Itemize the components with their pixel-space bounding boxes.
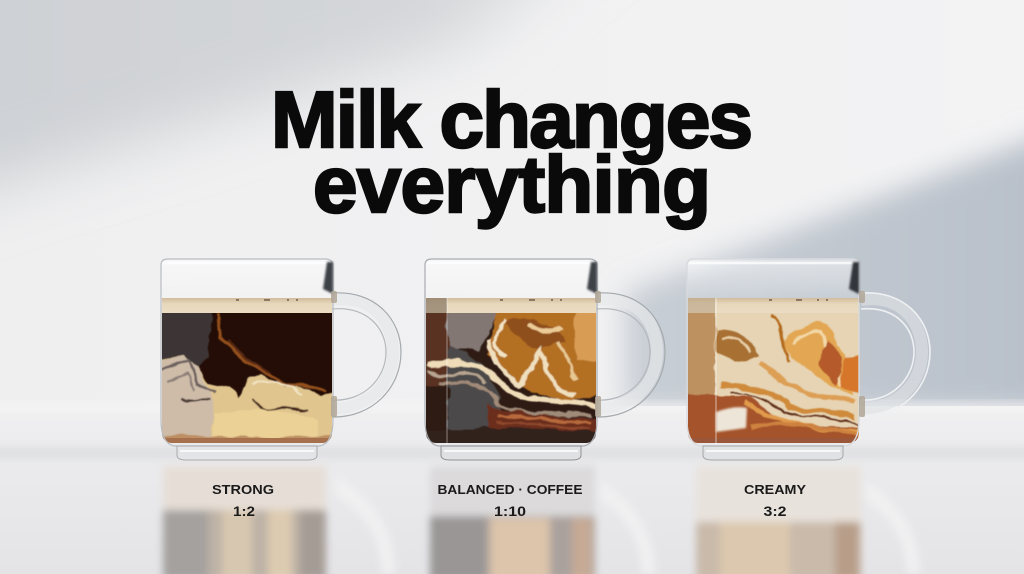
mug handle [597, 293, 665, 417]
coffee and milk swirl [162, 298, 332, 443]
mug: creamy 3:2 [682, 259, 930, 460]
title: everything [313, 140, 711, 229]
label: balanced coffee [438, 482, 583, 519]
title [271, 75, 753, 229]
glass body [425, 259, 597, 460]
mug: balanced 1:10 [420, 259, 665, 460]
reflection: creamy mug [696, 466, 920, 574]
reflection: strong mug [163, 466, 395, 574]
label: creamy: CREAMY [744, 482, 806, 497]
title: Milk changes [271, 75, 753, 164]
mug: strong 1:2 [155, 259, 401, 460]
label: balanced coffee: BALANCED · COFFEE [438, 482, 583, 497]
reflection: balanced mug [430, 466, 655, 574]
label: creamy [744, 482, 806, 519]
glass body [687, 259, 859, 460]
label: strong [212, 482, 274, 519]
glass body [161, 259, 333, 460]
mug handle [861, 293, 930, 417]
coffee and milk swirl [420, 298, 600, 450]
label: strong: 1:2 [233, 503, 255, 519]
handle joints [331, 291, 337, 417]
label: strong: STRONG [212, 482, 274, 497]
label: creamy: 3:2 [764, 503, 787, 519]
label: balanced coffee: 1:10 [494, 503, 526, 519]
coffee and milk swirl [688, 298, 859, 443]
handle joints [859, 291, 865, 417]
handle joints [595, 291, 601, 417]
mug handle [332, 293, 401, 417]
